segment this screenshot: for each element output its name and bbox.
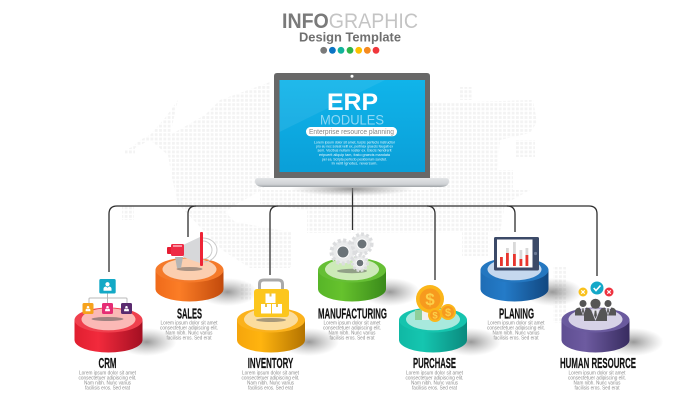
coins icon: $: [425, 290, 435, 309]
Human Resource label: HUMAN RESOURCE: [560, 356, 636, 372]
Human Resource text: consectetuer adipiscing elit.: [568, 376, 626, 382]
module: Planing: [480, 237, 582, 342]
screen body text: Lorem ipsum dolor sit amet, turpis perfecto instructior: [314, 140, 396, 144]
colour dots: [320, 47, 379, 54]
Sales text: Lorem ipsum dolor sit amet: [160, 320, 218, 326]
CRM text: [78, 370, 137, 392]
Planing text: facilisis eros. Sed erat: [494, 336, 539, 342]
Purchase text: consectetuer adipiscing elit.: [406, 376, 464, 382]
Sales text: facilisis eros. Sed erat: [166, 336, 212, 342]
CRM text: Nam nibh. Nunc varius: [84, 380, 131, 386]
Planing text: Nam nibh. Nunc varius: [492, 330, 540, 336]
Purchase cylinder: [399, 308, 501, 356]
title word: INFOGRAPHIC: INFOGRAPHIC: [282, 9, 418, 33]
CRM text: Lorem ipsum dolor sit amet: [79, 370, 137, 376]
module: Human Resource: [560, 282, 664, 392]
laptop: [255, 73, 449, 196]
screen body text: sem. Vocibus nullam noster ex. Elecis hendrerit: [318, 149, 392, 153]
heading MODULES: MODULES: [320, 111, 384, 127]
Purchase text: facilisis eros. Sed erat: [412, 386, 458, 392]
pill: Enterprise resource planning: [309, 129, 394, 136]
Manufacturing text: consectetuer adipiscing elit.: [323, 326, 381, 332]
Manufacturing text: facilisis eros. Sed erat: [330, 336, 375, 342]
Inventory text: facilisis eros. Sed erat: [248, 386, 294, 392]
Planing text: consectetuer adipiscing elit.: [487, 326, 545, 332]
screen body text: pro eu nec soleat velit ex, pertinax graecis feugait ex: [316, 144, 393, 148]
CRM label: CRM: [98, 356, 116, 372]
screen body text: [314, 140, 396, 166]
background world map: [110, 80, 580, 330]
coins icon: $: [445, 307, 451, 319]
Purchase text: Lorem ipsum dolor sit amet: [406, 370, 464, 376]
Manufacturing text: Nam nibh. Nunc varius: [328, 330, 376, 336]
module: Purchase: [399, 285, 501, 392]
Inventory text: consectetuer adipiscing elit.: [242, 376, 300, 382]
padlock box icon: [254, 280, 289, 317]
module: Inventory: [237, 280, 339, 392]
Inventory cylinder: [237, 308, 339, 356]
laptop shadow: [290, 182, 414, 196]
screen body text: per ea. Scripta perfecto posidonium sanctet.: [322, 157, 387, 161]
Planing text: [487, 320, 545, 342]
Human Resource text: Lorem ipsum dolor sit amet: [568, 370, 626, 376]
Sales cylinder: [156, 258, 258, 306]
Manufacturing cylinder: [318, 258, 420, 306]
Sales label: SALES: [177, 306, 202, 322]
CRM cylinder: [74, 308, 176, 356]
people team icon: [575, 282, 616, 321]
Inventory text: Nam nibh. Nunc varius: [247, 380, 294, 386]
Planing text: Lorem ipsum dolor sit amet: [488, 320, 545, 326]
module: CRM: [74, 279, 176, 392]
Planing cylinder: [480, 258, 582, 306]
title: [282, 9, 418, 54]
gears icon: [332, 234, 372, 270]
subtitle: Design Template: [299, 30, 401, 44]
base: [255, 178, 449, 187]
Manufacturing label: MANUFACTURING: [318, 306, 387, 322]
Human Resource text: facilisis eros. Sed erat: [574, 386, 620, 392]
tablet chart icon: [494, 237, 539, 270]
screen: [280, 80, 425, 172]
CRM org chart icon: [82, 279, 132, 314]
Human Resource text: [568, 370, 626, 392]
camera: [350, 75, 354, 78]
laptop lid: [274, 73, 430, 179]
Sales text: Nam nibh. Nunc varius: [166, 330, 213, 336]
Inventory label: INVENTORY: [248, 356, 293, 372]
Sales text: consectetuer adipiscing elit.: [160, 326, 218, 332]
Sales text: [160, 320, 218, 342]
Purchase text: Nam nibh. Nunc varius: [411, 380, 458, 386]
module: Manufacturing: [318, 234, 420, 342]
connector lines: [109, 188, 597, 280]
module: Sales: [156, 232, 258, 342]
coins icon: $: [432, 310, 438, 322]
screen body text: In velit ignotus, reversum.: [332, 162, 378, 166]
Manufacturing text: Lorem ipsum dolor sit amet: [324, 320, 381, 326]
screen body text: eripuerit aliquip tam, fosto graecis mandata: [319, 153, 391, 157]
CRM text: consectetuer adipiscing elit.: [78, 376, 136, 382]
CRM text: facilisis eros. Sed erat: [85, 386, 131, 392]
Inventory text: Lorem ipsum dolor sit amet: [242, 370, 300, 376]
megaphone icon: [167, 232, 217, 268]
Manufacturing text: [323, 320, 381, 342]
Inventory text: [242, 370, 300, 392]
Planing label: PLANING: [499, 306, 534, 322]
heading ERP: ERP: [327, 89, 378, 116]
Purchase label: PURCHASE: [413, 356, 456, 372]
Human Resource cylinder: [562, 308, 664, 356]
Human Resource text: Nam nibh. Nunc varius: [574, 380, 621, 386]
Purchase text: [406, 370, 464, 392]
coins icon: [415, 285, 456, 322]
